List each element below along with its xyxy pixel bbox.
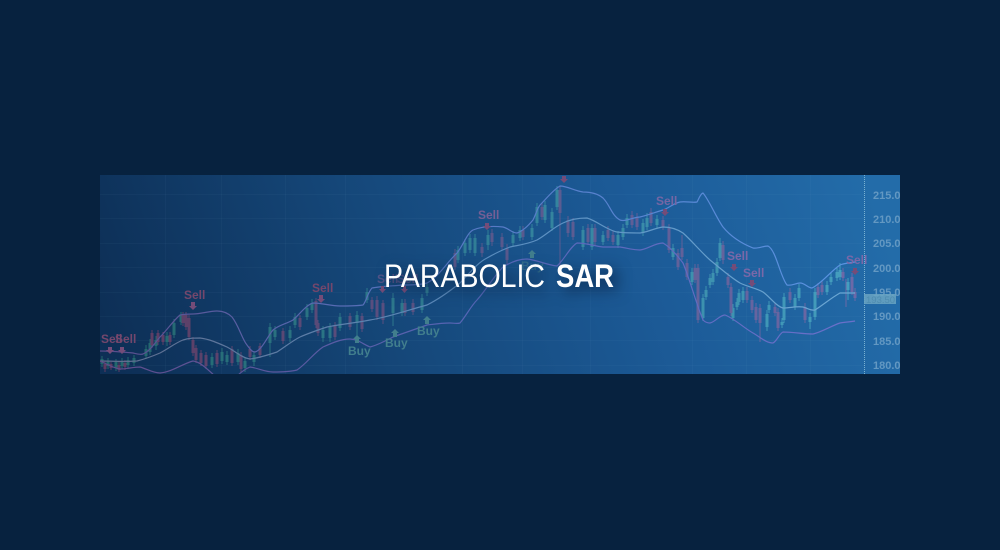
sell signals: Sell xyxy=(478,208,499,222)
title: PARABOLIC xyxy=(384,258,545,294)
sell signals: Sell xyxy=(743,266,764,280)
sell arrows xyxy=(106,176,859,354)
current price tag: 193.50 xyxy=(866,295,895,306)
sell label, far left: Sell xyxy=(101,332,122,346)
price axis labels: 185.00 xyxy=(873,336,907,348)
sell signals: Sell xyxy=(377,272,398,286)
price axis labels: 215.00 xyxy=(873,190,907,202)
price axis labels xyxy=(873,192,900,369)
current price tag xyxy=(864,294,896,304)
price axis labels: 200.00 xyxy=(873,263,907,275)
teal candles xyxy=(102,186,848,372)
upper band line xyxy=(100,186,855,354)
mauve candles xyxy=(105,186,855,372)
sell signals: Sell xyxy=(656,194,677,208)
buy arrows xyxy=(353,250,536,343)
buy signals: Buy xyxy=(385,336,408,350)
sell signals: Sell xyxy=(312,281,333,295)
lower band line xyxy=(100,243,855,377)
sell signals: Sell xyxy=(115,332,136,346)
price axis labels: 190.00 xyxy=(873,311,907,323)
sell signals: Sell xyxy=(184,288,205,302)
buy signals: Buy xyxy=(521,259,544,273)
sell signals: Sell xyxy=(846,253,867,267)
price axis line xyxy=(864,175,865,374)
buy signals xyxy=(348,259,544,358)
panel: chart banner xyxy=(100,175,907,377)
price axis labels: 180.00 xyxy=(873,360,907,372)
sell signals: Sell xyxy=(397,272,418,286)
price axis labels: 195.00 xyxy=(873,287,907,299)
price axis labels: 210.00 xyxy=(873,214,907,226)
buy signals: Buy xyxy=(348,344,371,358)
sell signals xyxy=(101,194,867,346)
chart content xyxy=(100,175,907,377)
price axis labels: 205.00 xyxy=(873,238,907,250)
panel background xyxy=(100,175,900,374)
buy signals: Buy xyxy=(417,324,440,338)
title: SAR xyxy=(556,258,614,294)
middle band line xyxy=(100,218,855,361)
candlestick chart xyxy=(102,186,855,372)
sell signals: Sell xyxy=(727,249,748,263)
